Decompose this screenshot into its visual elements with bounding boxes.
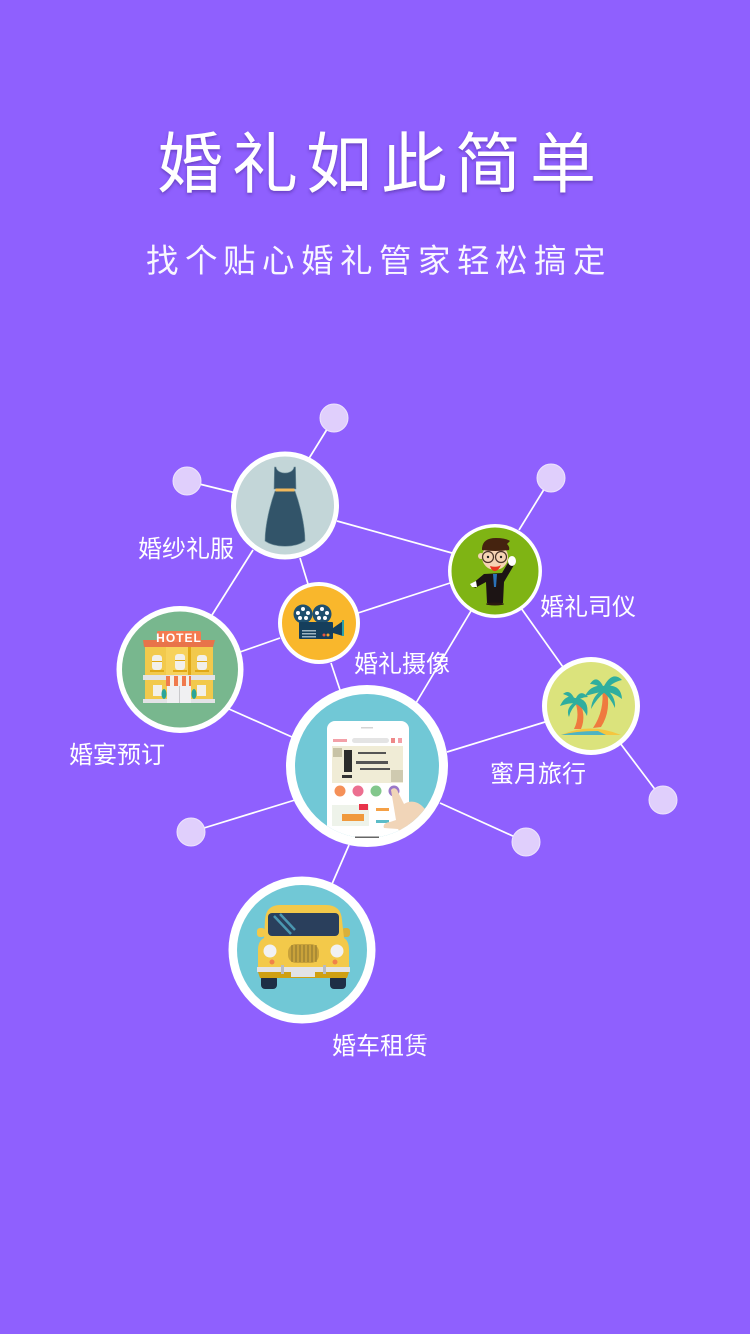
- icon: phone screen with hand: [327, 721, 425, 837]
- subtitle: 找个贴心婚礼管家轻松搞定: [146, 243, 606, 279]
- icon: yellow car: [257, 905, 350, 989]
- node: wedding dress: [231, 452, 339, 560]
- network connector lines: [187, 418, 663, 884]
- label: 婚宴预订: 婚宴预订: [69, 742, 165, 769]
- node: hotel: [116, 606, 244, 733]
- node: center phone app: [286, 685, 448, 851]
- label: 婚礼摄像: 婚礼摄像: [354, 651, 450, 678]
- label: 婚纱礼服: 婚纱礼服: [138, 536, 234, 563]
- icon: dress: [265, 467, 305, 546]
- node: video camera: [278, 582, 360, 664]
- infographic canvas: [70, 131, 678, 1056]
- label: 婚车租赁: 婚车租赁: [332, 1033, 428, 1060]
- node: wedding host: [448, 524, 542, 618]
- icon: palm island: [560, 676, 622, 735]
- icon: hotel building: HOTEL: [156, 631, 202, 645]
- node: wedding car: [228, 876, 376, 1024]
- label: 婚礼司仪: 婚礼司仪: [540, 594, 636, 621]
- node: honeymoon travel: [542, 657, 640, 755]
- icon: host character: [470, 538, 516, 606]
- title: 婚礼如此简单: [157, 127, 596, 201]
- icon: film camera: [294, 604, 344, 639]
- label: 蜜月旅行: 蜜月旅行: [490, 761, 586, 788]
- small node dots: [173, 404, 677, 856]
